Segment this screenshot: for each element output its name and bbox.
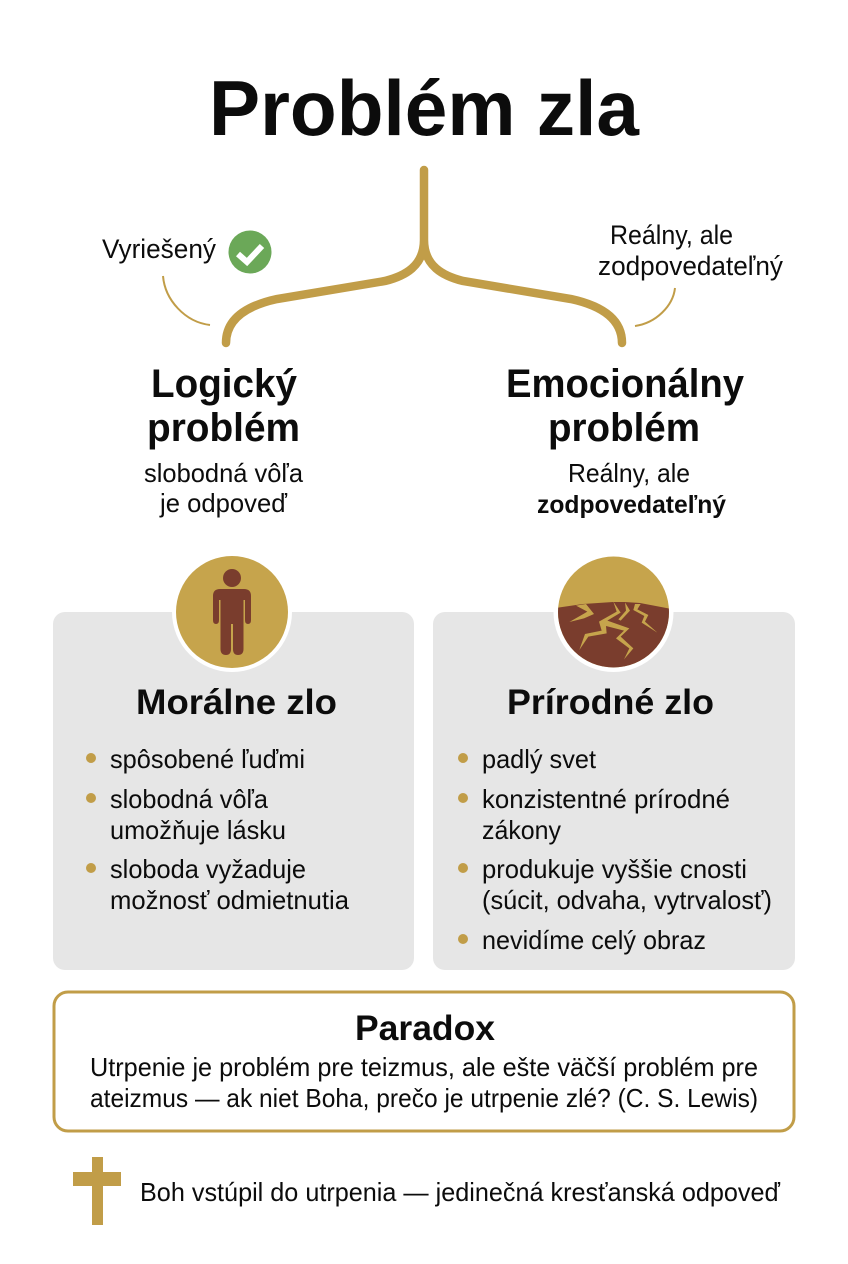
title: Problém zla bbox=[209, 64, 640, 152]
heading: natural evil: Prírodné zlo bbox=[507, 683, 714, 722]
list: natural evil points: nevidíme celý obraz bbox=[482, 925, 706, 955]
heading: logical problem: problém bbox=[147, 406, 300, 450]
list: natural evil points: produkuje vyššie cnosti bbox=[482, 854, 747, 884]
icon: green check bbox=[228, 230, 272, 274]
heading: logical problem bbox=[147, 362, 300, 450]
icon: cracked earth bbox=[554, 556, 674, 672]
footer statement: Boh vstúpil do utrpenia — jedinečná kresťanská odpoveď bbox=[140, 1177, 781, 1207]
text: paradox body bbox=[90, 1052, 758, 1113]
annotation: real but answerable: zodpovedateľný bbox=[598, 251, 783, 281]
panel: natural evil bbox=[433, 550, 795, 970]
icon: person bbox=[172, 552, 292, 672]
heading: emotional problem: Emocionálny bbox=[506, 362, 745, 406]
text: paradox body: Utrpenie je problém pre teizmus, ale ešte väčší problém pre bbox=[90, 1052, 758, 1082]
text: paradox body: ateizmus — ak niet Boha, prečo je utrpenie zlé? (C. S. Lewis) bbox=[90, 1083, 758, 1113]
icon: cross bbox=[73, 1157, 121, 1225]
heading: emotional problem: problém bbox=[548, 406, 700, 450]
list: natural evil points: konzistentné prírodné bbox=[482, 784, 730, 814]
annotation: real but answerable bbox=[598, 220, 783, 326]
heading: paradox: Paradox bbox=[355, 1009, 496, 1048]
panel: paradox callout bbox=[54, 992, 794, 1131]
list: moral evil points: možnosť odmietnutia bbox=[110, 885, 350, 915]
heading: emotional problem bbox=[506, 362, 745, 450]
list: moral evil points: sloboda vyžaduje bbox=[110, 854, 306, 884]
list: moral evil points bbox=[86, 744, 350, 915]
list: moral evil points: umožňuje lásku bbox=[110, 815, 286, 845]
text: logical problem answer bbox=[144, 458, 304, 518]
text: logical problem answer: slobodná vôľa bbox=[144, 458, 304, 488]
annotation: solved bbox=[102, 230, 272, 325]
panel: moral evil bbox=[53, 552, 414, 970]
text: emotional problem answer: zodpovedateľný bbox=[537, 491, 726, 519]
text: emotional problem answer: Reálny, ale bbox=[568, 458, 690, 488]
heading: moral evil: Morálne zlo bbox=[136, 683, 337, 722]
list: natural evil points: zákony bbox=[482, 815, 561, 845]
list: natural evil points: (súcit, odvaha, vytrvalosť) bbox=[482, 885, 772, 915]
annotation: real but answerable: Reálny, ale bbox=[610, 220, 733, 250]
heading: logical problem: Logický bbox=[151, 362, 298, 406]
text: logical problem answer: je odpoveď bbox=[159, 488, 288, 518]
text: emotional problem answer bbox=[537, 458, 726, 519]
branching bracket arrow bbox=[226, 170, 622, 343]
list: moral evil points: slobodná vôľa bbox=[110, 784, 269, 814]
list: natural evil points bbox=[458, 744, 772, 955]
list: moral evil points: spôsobené ľuďmi bbox=[110, 744, 305, 774]
list: natural evil points: padlý svet bbox=[482, 744, 597, 774]
annotation: solved: Vyriešený bbox=[102, 234, 216, 264]
